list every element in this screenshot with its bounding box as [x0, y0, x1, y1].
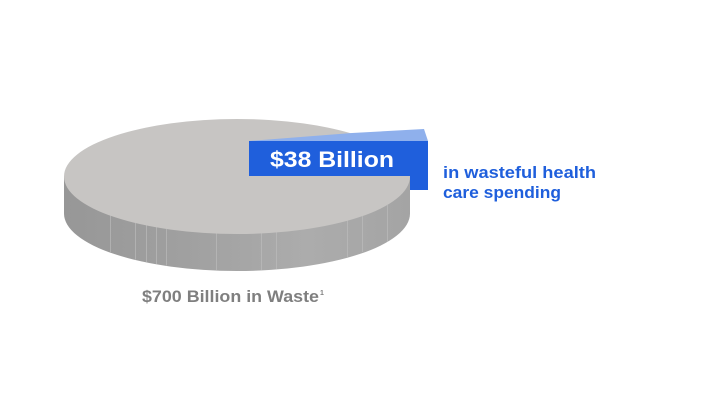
slice top face	[249, 129, 428, 141]
callout: in wasteful health care spending: in wasteful health	[443, 163, 596, 182]
callout: in wasteful health care spending	[443, 163, 596, 202]
$38 billion slice	[249, 129, 428, 190]
pie chart: $700 billion waste disc	[64, 119, 410, 271]
callout: in wasteful health care spending: care spending	[443, 183, 561, 202]
caption: $700 Billion in Waste: 1	[320, 290, 324, 297]
slice label: $38 Billion	[270, 147, 394, 172]
caption: $700 Billion in Waste: $700 Billion in Waste	[142, 287, 319, 306]
pie side wall	[64, 176, 410, 271]
pie top surface	[64, 119, 410, 234]
slice front face	[249, 141, 428, 190]
